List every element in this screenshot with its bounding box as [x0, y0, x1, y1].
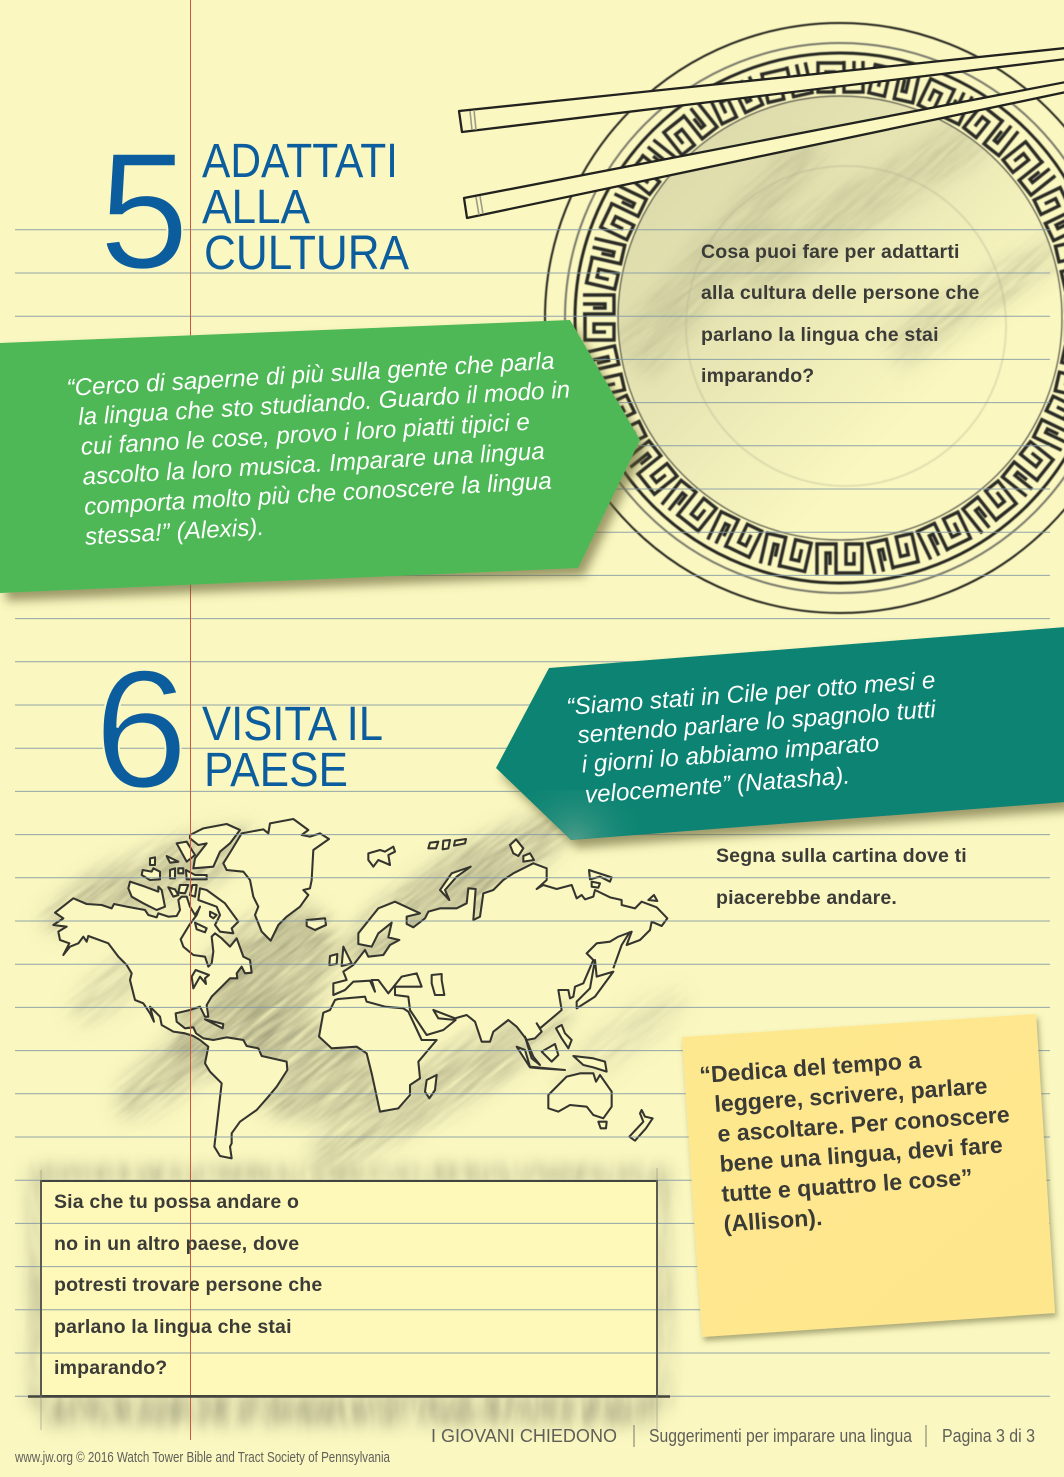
map: eurasia, africa, oceania [319, 839, 667, 1141]
heading: visita il paese: PAESE [204, 744, 348, 797]
question text: culture: parlano la lingua che stai [701, 324, 939, 346]
map pencil shading [0, 472, 886, 1477]
heading: adattati alla cultura: CULTURA [204, 227, 409, 280]
question text: culture: imparando? [701, 365, 814, 387]
question text: where to find speakers: parlano la lingua che stai [54, 1316, 292, 1338]
quote: Natasha: i giorni lo abbiamo imparato [581, 730, 880, 779]
sticky note quote: leggere, scrivere, parlare [714, 1072, 988, 1117]
footer: Suggerimenti per imparare una lingua [649, 1426, 913, 1446]
footer [14, 1425, 1035, 1466]
quote: Alexis: comporta molto più che conoscere la lingua [83, 468, 552, 521]
footer: I GIOVANI CHIEDONO [431, 1426, 617, 1446]
question text: where to find speakers: imparando? [54, 1357, 167, 1379]
sticky note quote: (Allison). [723, 1204, 823, 1237]
sticky note quote: “Dedica del tempo a [699, 1047, 922, 1088]
footer: www.jw.org © 2016 Watch Tower Bible and Tract Society of Pennsylvania [14, 1450, 391, 1466]
map: americas, greenland, arctic [53, 819, 352, 1158]
question text: culture: alla cultura delle persone che [701, 282, 980, 304]
heading: adattati alla cultura: ADATTATI [202, 135, 398, 188]
quote: Alexis: cui fanno le cose, provo i loro piatti tipici e [80, 409, 531, 461]
heading: visita il paese [202, 698, 383, 797]
sticky note quote: tutte e quattro le cose” [721, 1164, 973, 1207]
plate illustration [459, 0, 1064, 613]
quote: Alexis: stessa!” (Alexis). [84, 514, 265, 551]
heading number 6: 6 [94, 635, 188, 823]
question text: where to find speakers: Sia che tu possa andare o [54, 1191, 299, 1213]
answer box pencil shading [36, 1174, 662, 1414]
heading: adattati alla cultura [202, 135, 409, 280]
answer box frame [28, 1168, 670, 1430]
plate shading [618, 96, 1056, 500]
plate rings [545, 23, 1064, 613]
footer: Pagina 3 di 3 [942, 1426, 1035, 1446]
answer box fill [41, 1181, 657, 1396]
quote: Natasha: sentendo parlare lo spagnolo tutti [577, 696, 937, 749]
quote: Natasha: “Siamo stati in Cile per otto mesi e [565, 667, 936, 721]
plate meander border [583, 61, 1064, 575]
question text: culture: Cosa puoi fare per adattarti [701, 241, 960, 263]
map instruction text: Segna sulla cartina dove ti [716, 845, 967, 867]
chopsticks [459, 48, 1064, 218]
question text: where to find speakers: no in un altro paese, dove [54, 1233, 299, 1255]
heading: visita il paese: VISITA IL [202, 698, 383, 751]
heading number 5: 5 [99, 119, 189, 304]
red margin line [190, 0, 192, 1440]
map instruction text: piacerebbe andare. [716, 887, 897, 909]
question text: where to find speakers: potresti trovare persone che [54, 1274, 322, 1296]
sticky note quote: e ascoltare. Per conoscere [717, 1101, 1011, 1147]
quote: Alexis: “Cerco di saperne di più sulla gente che parla [66, 348, 555, 402]
heading: adattati alla cultura: ALLA [202, 181, 310, 234]
quote: Alexis: la lingua che sto studiando. Guardo il modo in [77, 376, 571, 431]
green quote banner [0, 320, 640, 593]
teal quote banner [496, 627, 1064, 840]
sticky note quote: bene una lingua, devi fare [719, 1132, 1004, 1177]
ruled notebook lines [15, 230, 1050, 1396]
sticky note [682, 1014, 1055, 1337]
world map [53, 819, 667, 1158]
quote: Natasha: velocemente” (Natasha). [584, 762, 851, 809]
quote: Alexis: ascolto la loro musica. Imparare una lingua [82, 438, 545, 491]
